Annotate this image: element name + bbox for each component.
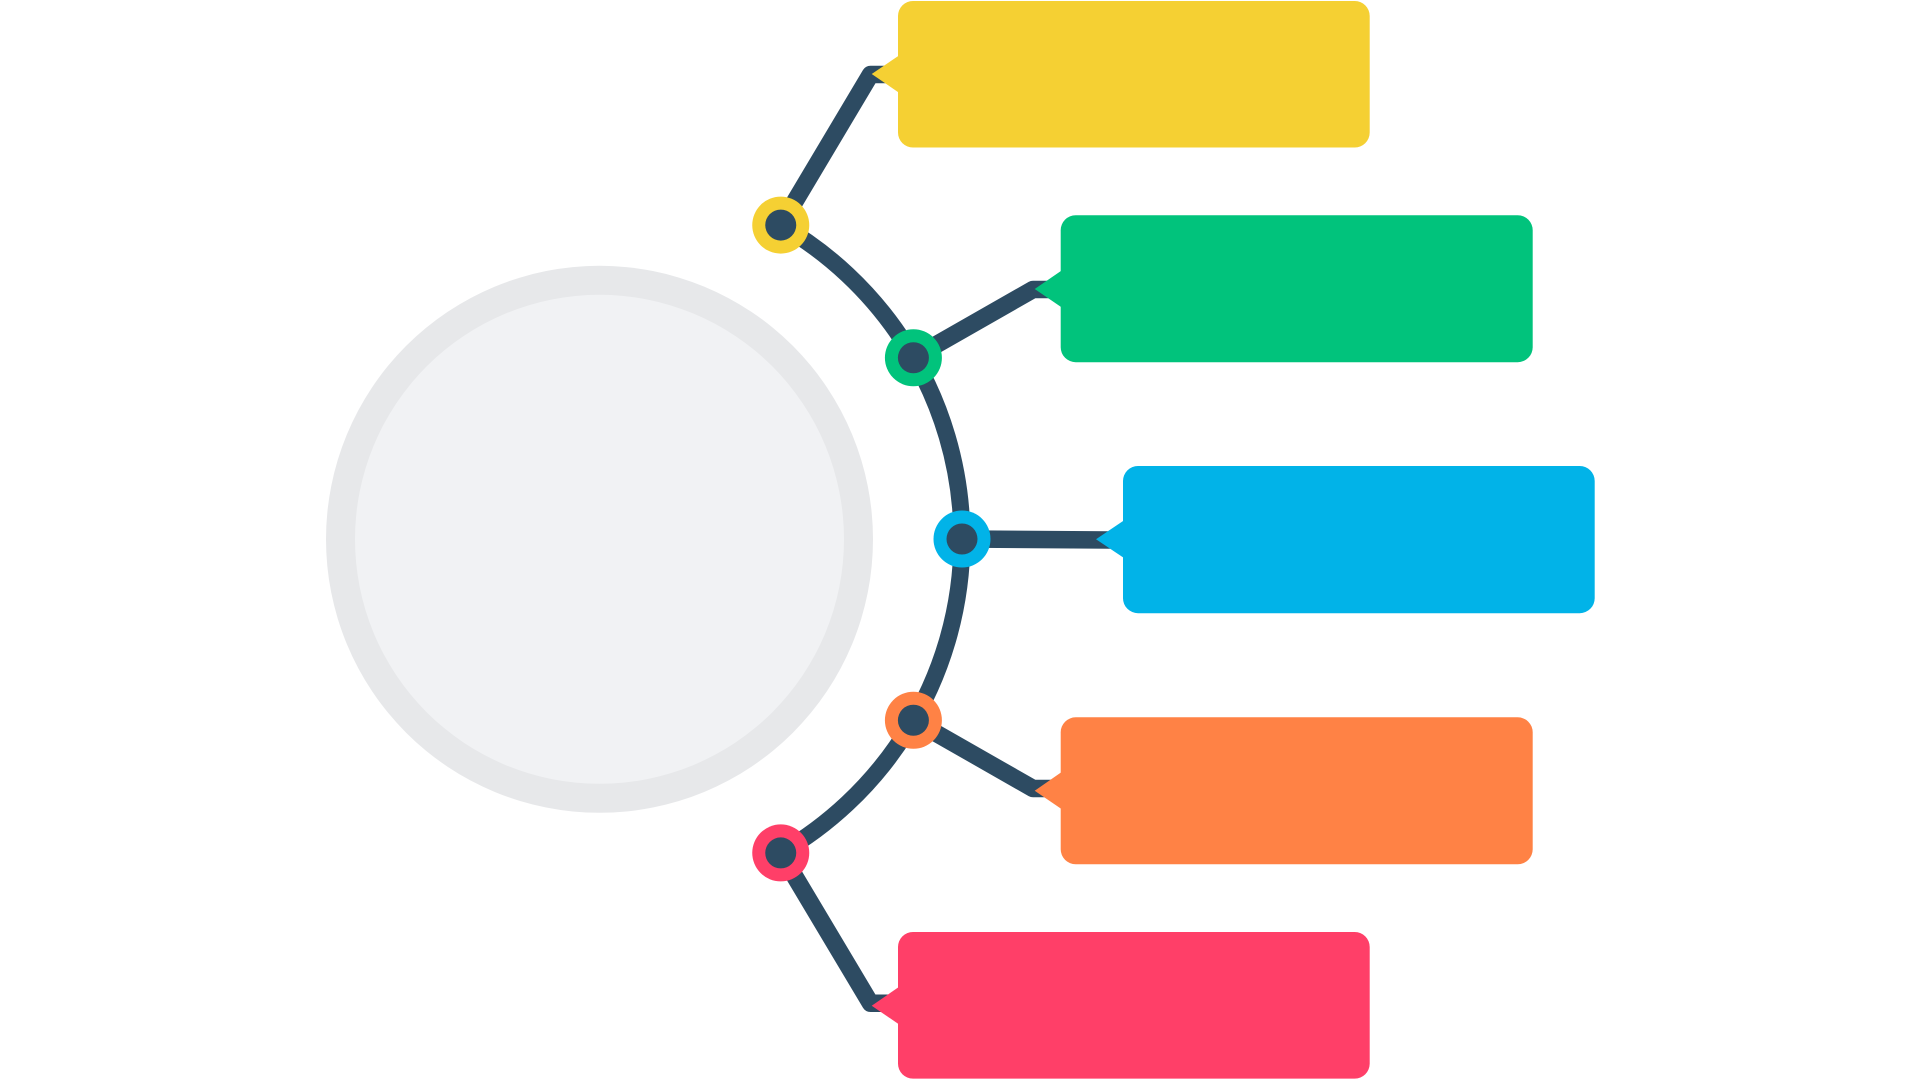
- connector: blue: [962, 539, 1110, 540]
- panel: orange callout: [1035, 717, 1533, 864]
- panel: blue callout: [1096, 466, 1595, 613]
- node: orange: [885, 692, 942, 749]
- panel: pink callout: [872, 932, 1370, 1079]
- connector arc: [781, 225, 962, 853]
- node: pink: [752, 824, 809, 881]
- central circle: [326, 266, 873, 813]
- panel: green callout: [1035, 215, 1533, 362]
- node: blue: [934, 510, 990, 568]
- connector: orange: [913, 720, 1070, 788]
- connector: pink: [781, 853, 900, 1003]
- node: yellow: [752, 197, 809, 254]
- panel: yellow callout: [872, 1, 1370, 148]
- connector: yellow: [781, 74, 900, 225]
- node: green: [885, 329, 942, 386]
- connector: green: [913, 290, 1070, 358]
